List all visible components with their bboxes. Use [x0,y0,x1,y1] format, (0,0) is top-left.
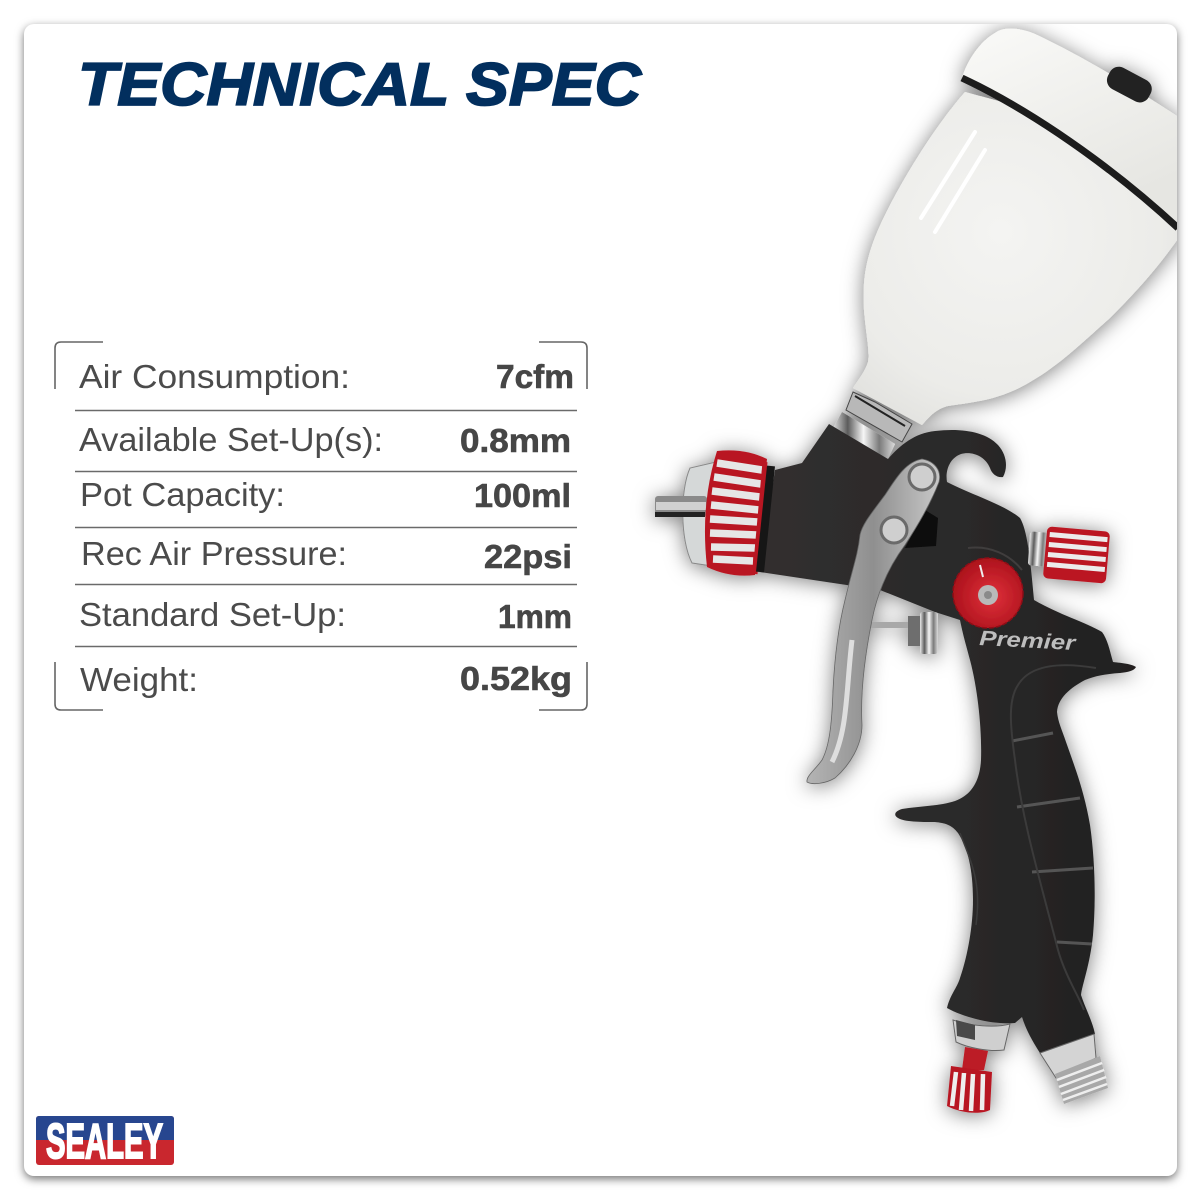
side red knob [1043,526,1110,584]
spray gun illustration [655,29,1180,1113]
row: weight: 0.52kg [460,660,572,697]
front tip rod and cap [655,462,716,566]
chrome neck [832,392,912,463]
front needle fitting [866,612,938,654]
gravity cup [853,29,1180,425]
row: weight [80,660,572,698]
row: available set-ups: 0.8mm [460,422,571,459]
sealey logo [36,1115,174,1169]
sealey logo: SEALEY [46,1115,163,1169]
row: air consumption: Air Consumption: [79,358,350,395]
cup body [853,92,1180,425]
side chrome collar [1028,531,1048,567]
brand name: Premier [979,627,1078,655]
trigger [807,459,940,784]
row: pot capacity: 100ml [474,477,571,514]
row: weight: Weight: [80,661,198,698]
row: available set-ups: Available Set-Up(s): [79,421,383,458]
lid knob [1103,63,1155,106]
lid seal band [962,78,1178,228]
title: TECHNICAL SPEC [78,51,643,118]
grip details [960,547,1096,1010]
specification table [55,342,587,710]
rear red knurled knob [705,450,771,576]
row: air consumption: 7cfm [496,358,574,395]
row: recommended air pressure: 22psi [484,538,572,575]
row: recommended air pressure: Rec Air Pressure: [81,535,347,572]
row: standard set-up: 1mm [498,598,572,635]
row: standard set-up [79,596,572,635]
red dial [953,558,1023,628]
row: available set-ups [79,421,571,459]
row: standard set-up: Standard Set-Up: [79,596,346,633]
barrel slot [905,510,938,548]
gun body [760,424,1136,1053]
cup highlights [921,132,985,232]
row: pot capacity: Pot Capacity: [80,476,285,513]
row: recommended air pressure [81,535,572,575]
row: pot capacity [80,476,571,514]
row: air consumption [79,358,574,395]
table corner brackets [55,342,587,710]
cup lid [953,24,1177,149]
bottom air adjuster [947,1020,1010,1113]
bottom air inlet [1040,1034,1108,1104]
trigger rivets [909,464,935,490]
